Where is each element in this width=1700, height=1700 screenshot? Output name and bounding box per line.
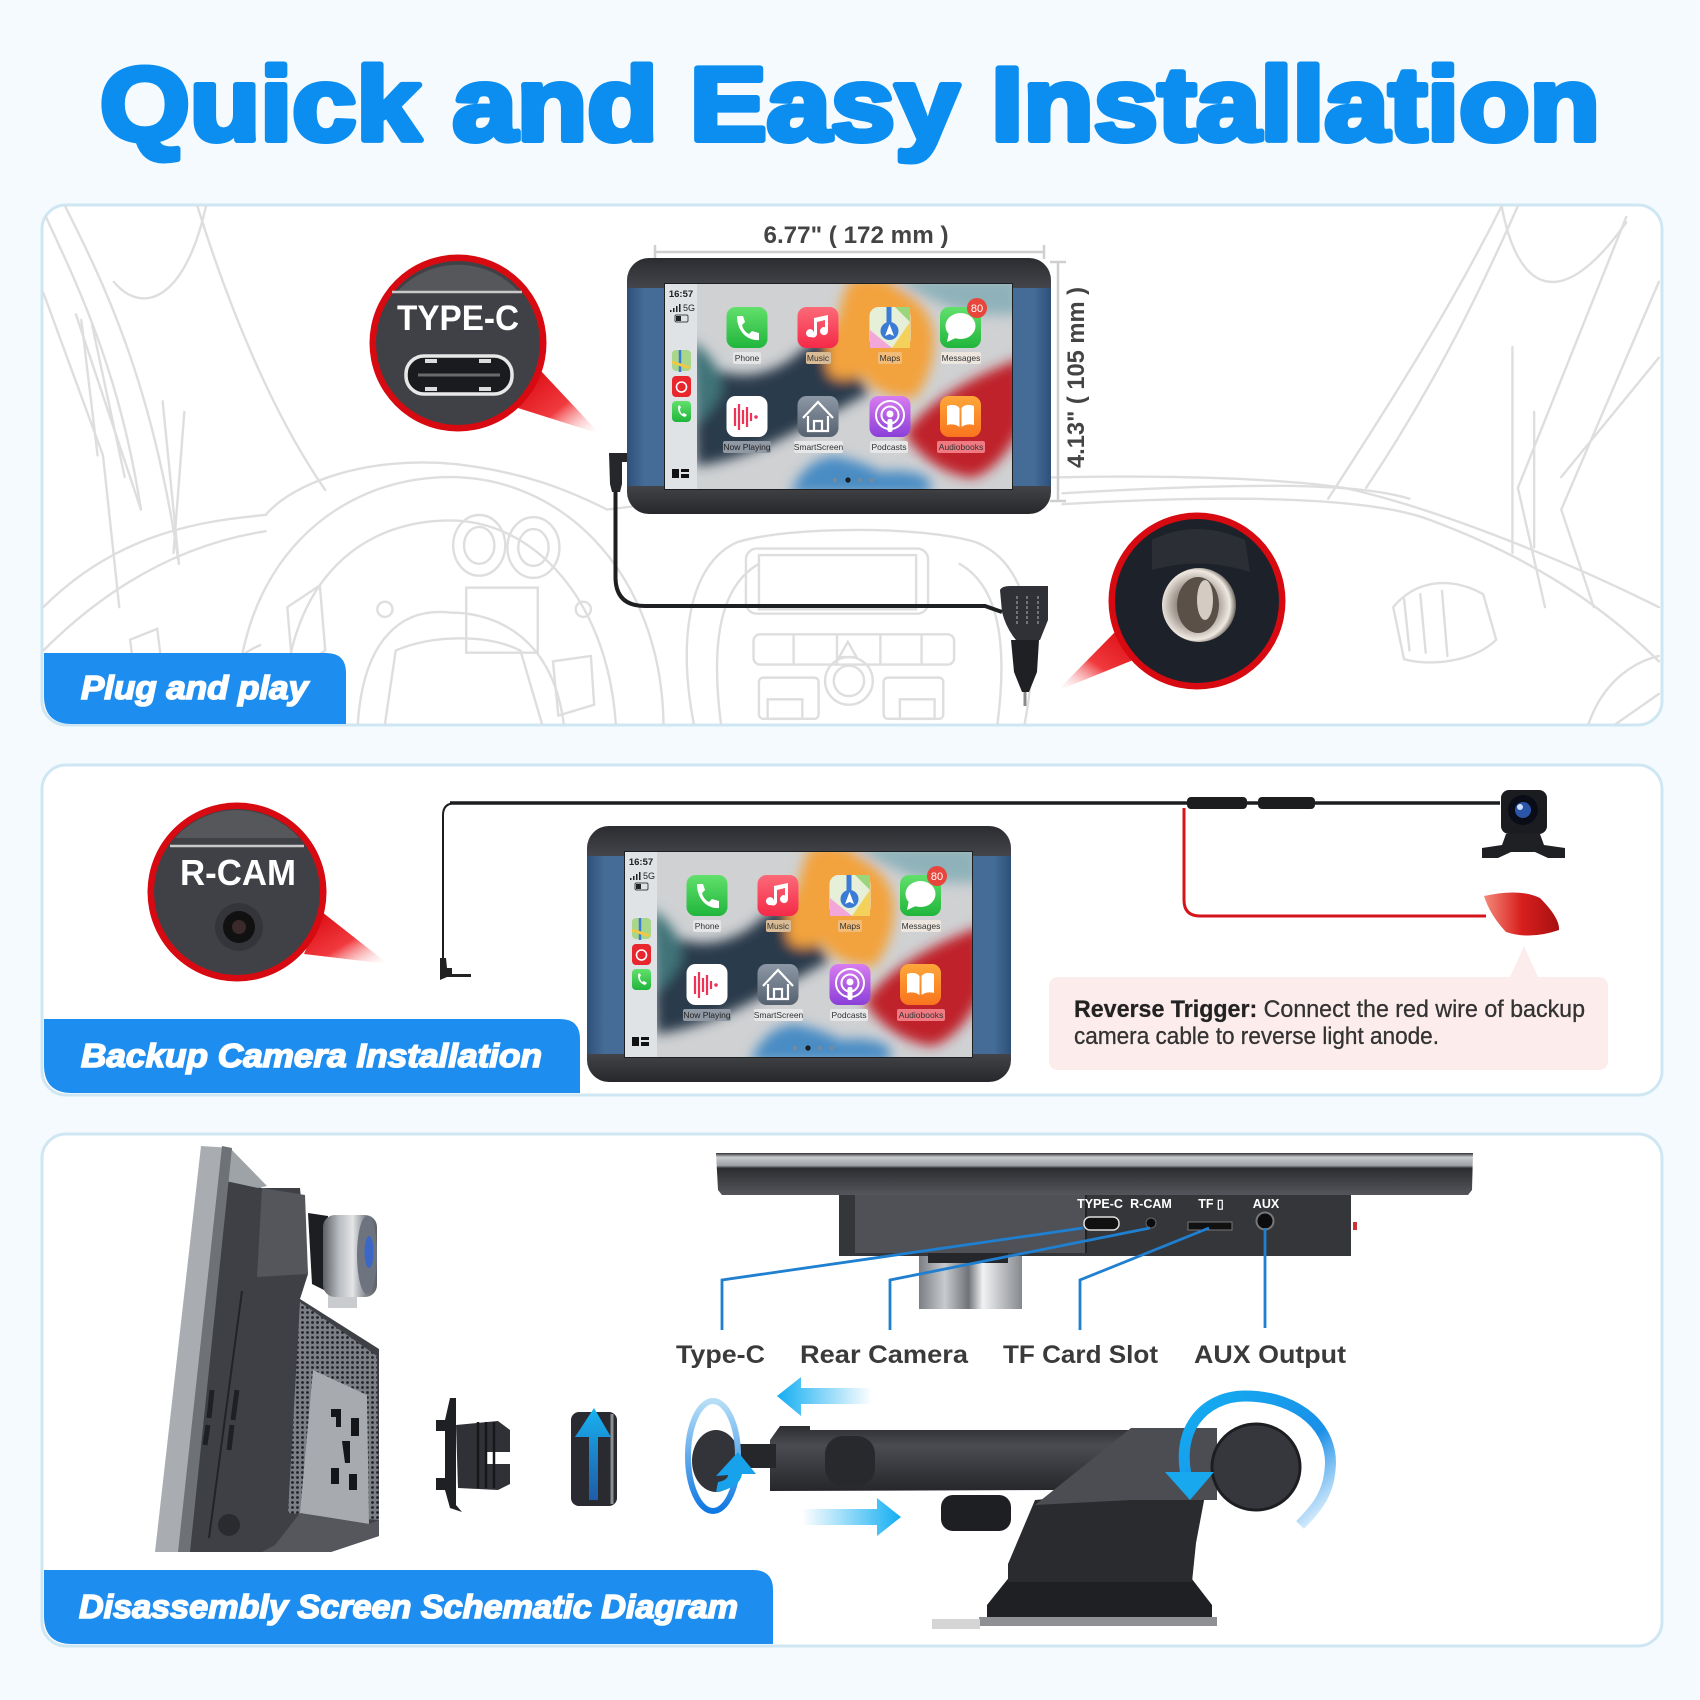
top view of device with ports	[716, 1153, 1473, 1309]
tightening bolt	[941, 1495, 1011, 1531]
red trigger wire	[1184, 808, 1486, 916]
app: maps: Maps	[880, 353, 900, 363]
lock ring with arrow	[571, 1408, 617, 1506]
app: audiobooks	[937, 396, 985, 453]
app: phone: Phone	[735, 353, 760, 363]
lower body edge	[262, 1513, 379, 1552]
pointer	[304, 912, 388, 964]
suction base	[987, 1570, 1212, 1617]
page dots	[793, 1045, 834, 1051]
status bar: 16:57	[629, 857, 653, 868]
car charger	[1000, 586, 1048, 706]
port labels	[1077, 1197, 1280, 1211]
app: music: Music	[767, 921, 790, 931]
arrow: ball joint rotation	[688, 1401, 756, 1511]
app: podcasts: Podcasts	[832, 1010, 866, 1020]
pointer	[1057, 630, 1143, 691]
status bar: 5G	[683, 303, 695, 313]
camera lens	[308, 1213, 328, 1292]
mesh grille	[288, 1302, 379, 1520]
panel: plug and play	[42, 205, 1662, 725]
app: smartscreen: SmartScreen	[754, 1010, 804, 1020]
label: disassembly schematic: Disassembly Screen Schematic Diagram	[79, 1588, 738, 1625]
suction mount arm	[692, 1424, 1300, 1629]
callout: reverse trigger	[1049, 946, 1608, 1070]
callout: reverse trigger: camera cable to reverse light anode.	[1074, 1023, 1439, 1050]
label: disassembly schematic	[44, 1570, 773, 1644]
arrow: arm extends left	[777, 1377, 872, 1416]
app: messages: Messages	[902, 921, 940, 931]
port names: AUX Output	[1194, 1341, 1347, 1369]
vents	[205, 1390, 237, 1450]
wedge shell	[226, 1149, 267, 1188]
port labels: TF ▯	[1198, 1197, 1224, 1211]
callout: cigarette socket	[1057, 512, 1286, 691]
app: messages	[900, 866, 947, 932]
status bar: 16:57	[669, 289, 693, 300]
app: maps: Maps	[840, 921, 860, 931]
app: now playing: Now Playing	[723, 442, 771, 452]
height dimension: 4.13" ( 105 mm )	[1063, 287, 1090, 468]
port labels: TYPE-C	[1077, 1197, 1123, 1211]
label: plug and play	[44, 653, 346, 724]
app: podcasts: Podcasts	[872, 442, 906, 452]
app: smartscreen	[754, 964, 804, 1021]
status bar	[629, 857, 655, 890]
dock icons	[632, 918, 651, 1046]
callout: type-c port	[370, 254, 600, 434]
app: messages: 80	[971, 303, 983, 315]
port names: TF Card Slot	[1003, 1341, 1159, 1369]
support cylinder	[919, 1256, 1022, 1309]
panel: disassembly schematic	[42, 1134, 1662, 1646]
port labels: R-CAM	[1130, 1197, 1172, 1211]
app: audiobooks: Audiobooks	[899, 1010, 943, 1020]
app: messages	[940, 298, 987, 364]
height dimension	[1050, 262, 1090, 501]
app: now playing	[723, 396, 771, 453]
arrow: arm retracts right	[802, 1498, 901, 1536]
app: messages: 80	[931, 871, 943, 883]
app: audiobooks	[897, 964, 945, 1021]
port labels: AUX	[1253, 1197, 1280, 1211]
app: music	[798, 307, 838, 364]
ball joint	[738, 1444, 776, 1468]
ports	[1084, 1212, 1274, 1230]
angled housing	[1035, 1428, 1217, 1505]
page dots	[833, 477, 874, 483]
app: smartscreen: SmartScreen	[794, 442, 844, 452]
power cable	[609, 453, 1002, 612]
status bar: 5G	[643, 871, 655, 881]
port leader lines	[722, 1228, 1265, 1330]
app: smartscreen	[794, 396, 844, 453]
lower arm clamp	[825, 1436, 875, 1486]
body seam	[209, 1291, 242, 1538]
arrow: knob rotation	[1165, 1396, 1330, 1525]
callout: reverse trigger: Reverse Trigger: Connect the red wire of backup	[1074, 996, 1585, 1023]
port names	[676, 1341, 1347, 1369]
screen wallpaper	[665, 277, 1022, 494]
width dimension	[655, 222, 1044, 259]
callout: r-cam port	[148, 802, 388, 982]
device side view, exploded	[155, 1146, 379, 1552]
device: carplay screen, backup panel	[587, 826, 1011, 1082]
rear body	[188, 1181, 379, 1552]
callout: r-cam port: R-CAM	[180, 852, 296, 893]
dock icons	[672, 350, 691, 478]
app: audiobooks: Audiobooks	[939, 442, 983, 452]
app: maps	[830, 875, 870, 932]
app: music	[758, 875, 798, 932]
callout: type-c port: TYPE-C	[397, 299, 519, 338]
app: podcasts	[830, 964, 870, 1021]
rear knob	[1212, 1424, 1300, 1510]
camera housing	[257, 1188, 308, 1277]
app: phone	[686, 875, 728, 932]
device: carplay screen front view	[627, 258, 1051, 514]
label: plug and play: Plug and play	[81, 669, 310, 706]
panel: backup camera installation	[42, 765, 1662, 1095]
app: podcasts	[870, 396, 910, 453]
screen wallpaper	[625, 845, 982, 1062]
telescopic arm	[770, 1426, 1217, 1491]
app: now playing: Now Playing	[683, 1010, 731, 1020]
app: messages: Messages	[942, 353, 980, 363]
label: backup camera installation	[44, 1019, 580, 1093]
port names: Rear Camera	[800, 1341, 969, 1369]
app: music: Music	[807, 353, 830, 363]
app: maps	[870, 307, 910, 364]
width dimension: 6.77" ( 172 mm )	[764, 222, 948, 249]
title: Quick and Easy Installation	[100, 47, 1600, 163]
label: backup camera installation: Backup Camera Installation	[81, 1037, 542, 1074]
car dashboard line sketch background	[43, 206, 1659, 724]
mounting bracket	[436, 1398, 510, 1512]
app: phone	[726, 307, 768, 364]
port names: Type-C	[676, 1341, 765, 1369]
pointer	[518, 370, 600, 434]
reverse light	[1484, 892, 1559, 936]
metal plate	[300, 1370, 369, 1524]
app: now playing	[683, 964, 731, 1021]
status bar	[669, 289, 695, 322]
app: phone: Phone	[695, 921, 720, 931]
camera cable	[440, 797, 1500, 980]
neck	[1008, 1490, 1206, 1582]
backup camera	[1482, 790, 1565, 858]
